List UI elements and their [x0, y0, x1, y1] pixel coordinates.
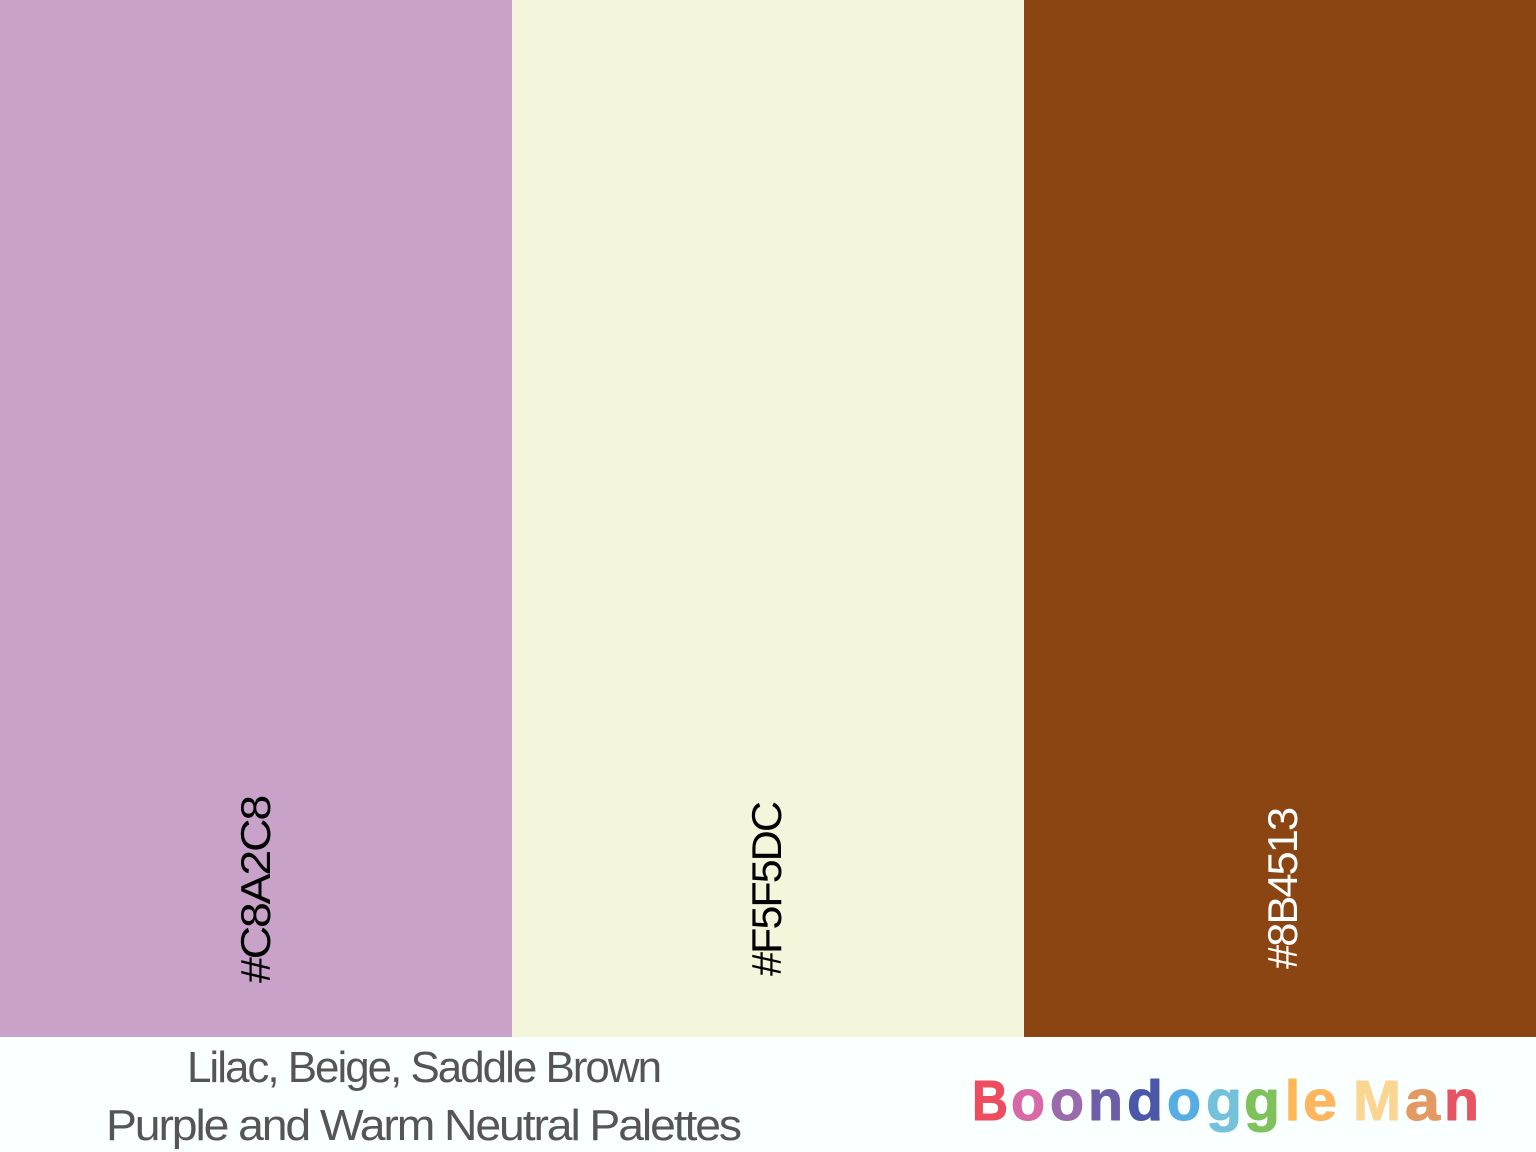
logo: Boondoggle Man wordmark: a	[1405, 1069, 1441, 1133]
logo: Boondoggle Man wordmark: e	[1303, 1069, 1337, 1133]
logo: Boondoggle Man wordmark: o	[1167, 1069, 1201, 1133]
logo: Boondoggle Man wordmark: l	[1285, 1069, 1300, 1133]
label: lilac hex code: #C8A2C8	[232, 796, 279, 983]
footer background	[0, 1036, 1536, 1152]
logo: Boondoggle Man wordmark: d	[1127, 1069, 1163, 1133]
title: palette name and category	[106, 1043, 741, 1150]
logo: Boondoggle Man wordmark: B	[972, 1069, 1008, 1133]
logo: Boondoggle Man wordmark: M	[1353, 1069, 1401, 1133]
title: palette name and category: Purple and Warm Neutral Palettes	[106, 1101, 741, 1150]
label: beige hex code: #F5F5DC	[743, 802, 790, 976]
logo: Boondoggle Man wordmark: o	[1011, 1069, 1045, 1133]
logo: Boondoggle Man wordmark: n	[1444, 1069, 1479, 1133]
logo: Boondoggle Man wordmark	[972, 1069, 1479, 1133]
label: saddle brown hex code: #8B4513	[1259, 808, 1306, 969]
logo: Boondoggle Man wordmark: o	[1050, 1069, 1084, 1133]
logo: Boondoggle Man wordmark: g	[1244, 1069, 1280, 1133]
logo: Boondoggle Man wordmark: g	[1206, 1069, 1242, 1133]
title: palette name and category: Lilac, Beige, Saddle Brown	[187, 1043, 660, 1092]
logo: Boondoggle Man wordmark: n	[1088, 1069, 1123, 1133]
